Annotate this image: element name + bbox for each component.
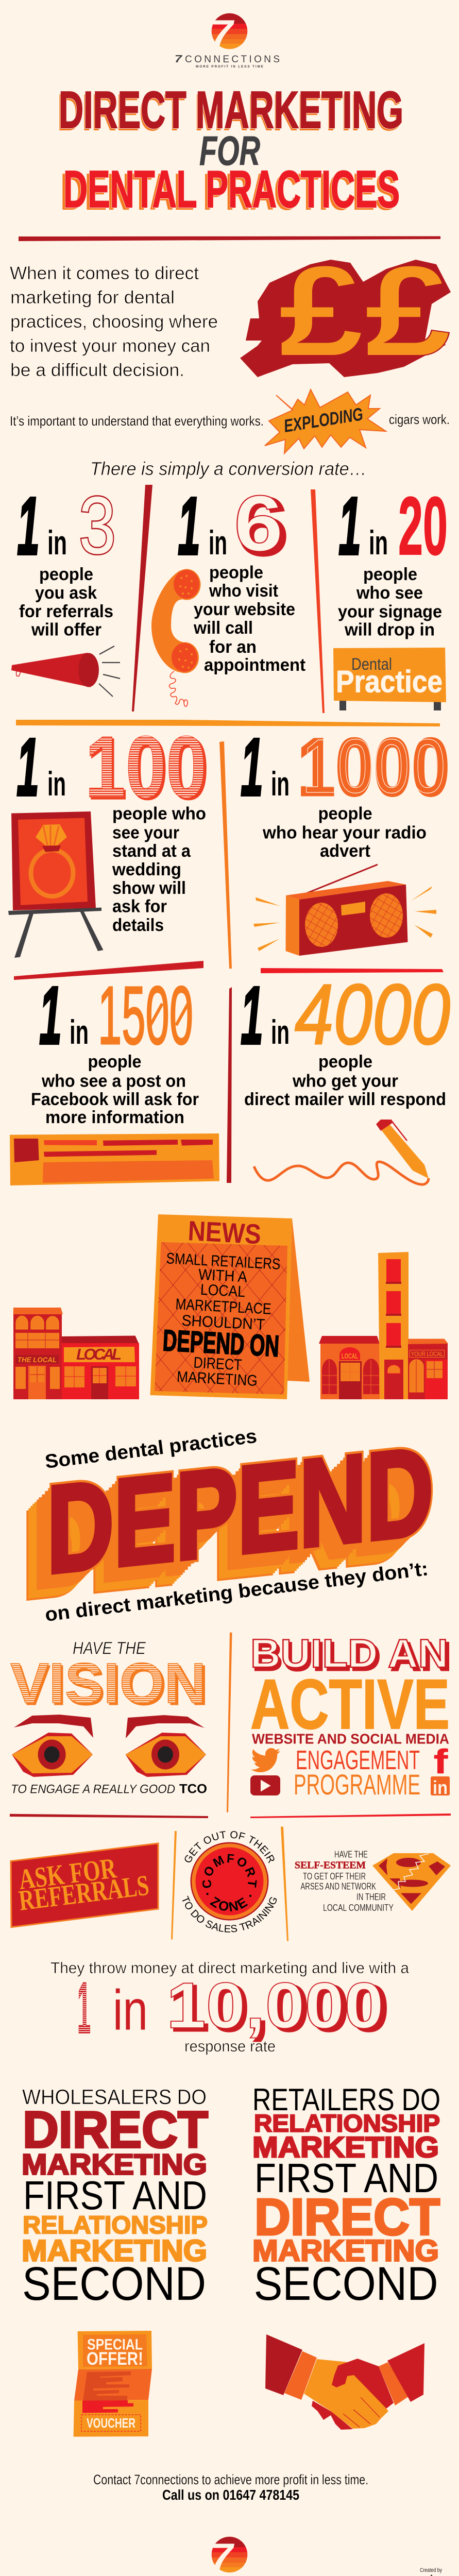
panel: wholesalers: WHOLESALERS DO xyxy=(22,2085,207,2109)
panel: 1 in 1500: people xyxy=(88,1052,141,1072)
panel: have the vision: VISION xyxy=(10,1652,206,1715)
panel: 1 in 6: who visit xyxy=(209,581,278,601)
text: contact xyxy=(93,2472,368,2503)
panel: build an active: BUILD AN xyxy=(250,1631,448,1676)
panel: retailers: MARKETING xyxy=(252,2234,439,2268)
logo: 7connections header: 7 xyxy=(210,13,234,54)
panel: retailers: DIRECT xyxy=(254,2189,440,2246)
text: contact: Call us on 01647 478145 xyxy=(162,2487,299,2503)
panel: 1 in 100: wedding xyxy=(112,860,181,879)
illustration: left shops: THE LOCAL xyxy=(18,1355,57,1364)
panel: retailers: SECOND xyxy=(254,2258,438,2310)
illustration: right shops xyxy=(319,1252,448,1399)
logo: 7connections header: 7 xyxy=(175,54,182,65)
credit: created by apexhub: Created by xyxy=(420,2567,442,2573)
panel: 1 in 100: stand at a xyxy=(112,841,191,861)
panel: 1 in 3: for referrals xyxy=(19,602,113,621)
panel: comfort zone badge xyxy=(182,1831,277,1933)
panel: build an active xyxy=(250,1631,451,1801)
icon: superman shield xyxy=(372,1853,451,1911)
panel: comfort zone badge: TO DO SALES TRAINING xyxy=(182,1896,277,1933)
panel: 1 in 3: 1 xyxy=(17,480,40,572)
panel: 1 in 6: appointment xyxy=(204,655,305,675)
panel: self-esteem: IN THEIR xyxy=(356,1892,386,1902)
panel: 1 in 1500 xyxy=(10,969,219,1185)
panel: ask for referrals: REFERRALS xyxy=(17,1869,151,1917)
panel: 1 in 6: 6 xyxy=(234,479,283,568)
panel: 1 in 1500: more information xyxy=(45,1108,184,1127)
panel: 1 in 100: in xyxy=(47,765,66,803)
icon: youtube xyxy=(250,1775,280,1795)
panel: retailers: MARKETING xyxy=(252,2131,439,2164)
panel: have the vision xyxy=(10,1639,209,1796)
panel: comfort zone badge: · ZONE · xyxy=(206,1893,252,1911)
text: on direct marketing: on direct marketing because they don’t: xyxy=(44,1558,430,1626)
panel: 1 in 1500: 1500 xyxy=(98,969,193,1061)
icon: double pound signs: £ xyxy=(279,239,363,383)
intro text xyxy=(10,263,218,380)
intro text: to invest your money can xyxy=(10,336,210,356)
illustration: news sandwich board: SHOULDN’T xyxy=(181,1312,265,1333)
panel: 1 in 4000: 1 xyxy=(241,969,263,1061)
icon: exploding starburst: EXPLODING xyxy=(282,404,364,436)
panel: self-esteem: TO GET OFF THEIR xyxy=(303,1871,366,1882)
panel: build an active: WEBSITE AND SOCIAL MEDIA xyxy=(252,1731,449,1747)
illustration: news sandwich board: MARKETPLACE xyxy=(175,1296,271,1318)
icon: double pound signs: £ xyxy=(365,239,451,383)
panel: have the vision: VISION xyxy=(12,1654,209,1717)
panel: 1 in 6 xyxy=(151,479,305,706)
stat: 1 in 10,000 xyxy=(77,1967,389,2055)
stat: 1 in 10,000: 10,000 xyxy=(169,1972,389,2045)
panel: 1 in 4000: who get your xyxy=(292,1072,398,1091)
panel: have the vision: TCO xyxy=(179,1782,207,1796)
icon: special offer voucher: OFFER! xyxy=(87,2349,143,2369)
panel: ask for referrals xyxy=(11,1843,158,1927)
panel: 1 in 20: in xyxy=(369,523,388,562)
illustration: right shops: LOCAL xyxy=(342,1352,358,1361)
illustration: news sandwich board: MARKETING xyxy=(176,1368,258,1389)
panel: wholesalers: MARKETING xyxy=(22,2148,207,2181)
panel: 1 in 6: 1 xyxy=(178,480,200,572)
text: everything works: cigars work. xyxy=(389,412,450,427)
icon: eyes and eyebrows xyxy=(12,1715,206,1777)
panel: retailers: RELATIONSHIP xyxy=(254,2110,440,2137)
panel: 1 in 3 xyxy=(11,480,120,697)
panel: 1 in 1000: who hear your radio xyxy=(262,823,427,843)
illustration: news sandwich board: DEPEND ON xyxy=(162,1324,280,1363)
icon: special offer voucher: VOUCHER xyxy=(87,2415,135,2431)
icon: double pound signs xyxy=(240,239,451,383)
panel: 1 in 4000: direct mailer will respond xyxy=(244,1090,446,1109)
subheading: conversion rate: There is simply a conversion rate… xyxy=(90,458,367,479)
panel: 1 in 1000 xyxy=(241,721,450,956)
illustration: news sandwich board: DIRECT xyxy=(193,1354,242,1374)
illustration: left shops xyxy=(13,1308,139,1399)
panel: 1 in 100: details xyxy=(112,916,164,935)
panel: 1 in 100: 1 xyxy=(16,721,39,813)
panel: 1 in 6: 6 xyxy=(236,480,288,572)
logo: 7connections footer xyxy=(211,2537,247,2573)
panel: 1 in 100: see your xyxy=(112,823,179,843)
credit: created by apexhub xyxy=(418,2567,444,2576)
panel: wholesalers: MARKETING xyxy=(22,2234,207,2268)
text: everything works: It’s important to understand that everything works. xyxy=(10,413,264,429)
illustration: news sandwich board xyxy=(150,1214,310,1399)
panel: self-esteem: ARSES AND NETWORK xyxy=(301,1882,376,1892)
panel: 1 in 3: in xyxy=(47,523,67,562)
panel: self-esteem: SELF-ESTEEM xyxy=(295,1860,366,1871)
intro text: When it comes to direct xyxy=(10,263,199,283)
stat: 1 in 10,000: in xyxy=(113,1978,148,2042)
illustration: left shops: LOCAL xyxy=(76,1345,122,1363)
panel: 1 in 20: your signage xyxy=(338,602,442,622)
panel: 1 in 3: people xyxy=(39,565,93,584)
panel: 1 in 6: for an xyxy=(209,637,257,657)
panel: 1 in 1000: advert xyxy=(320,841,370,861)
panel: 1 in 100: people who xyxy=(112,804,206,824)
logo: 7connections header: MORE PROFIT IN LESS TIME xyxy=(196,65,264,69)
panel: 1 in 3: will offer xyxy=(31,620,101,640)
panel: wholesalers xyxy=(22,2085,208,2310)
title: FOR xyxy=(199,128,260,174)
panel: 1 in 100 xyxy=(8,718,209,958)
intro text: be a difficult decision. xyxy=(10,360,184,380)
text: everything works xyxy=(10,412,450,429)
panel: 1 in 3: you ask xyxy=(35,583,97,603)
panel: 1 in 3: 3 xyxy=(79,480,116,571)
panel: 1 in 20: 1 xyxy=(338,480,361,572)
panel: self-esteem: HAVE THE xyxy=(334,1850,368,1860)
panel: retailers xyxy=(252,2082,440,2310)
icon: dental practice sign xyxy=(333,648,446,710)
icon: handshake xyxy=(265,2334,424,2430)
panel: 1 in 1000: in xyxy=(271,765,290,803)
panel: have the vision: HAVE THE xyxy=(73,1639,146,1658)
stat: 1 in 10,000: 1 xyxy=(77,1967,91,2049)
panel: 1 in 100: ask for xyxy=(112,896,167,916)
illustration: news sandwich board: LOCAL xyxy=(200,1281,246,1300)
panel: 1 in 4000: people xyxy=(318,1052,372,1072)
panel: 1 in 20: people xyxy=(363,565,417,584)
illustration: right shops: YOUR LOCAL xyxy=(411,1350,443,1358)
panel: self-esteem: LOCAL COMMUNITY xyxy=(323,1903,394,1913)
panel: 1 in 6: in xyxy=(209,523,227,562)
panel: 1 in 100: 100 xyxy=(87,720,209,818)
panel: build an active: BUILD AN xyxy=(252,1634,451,1679)
panel: self-esteem xyxy=(295,1850,451,1913)
stat: 1 in 10,000: response rate xyxy=(184,2037,276,2055)
panel: wholesalers: SECOND xyxy=(22,2258,206,2310)
logo: 7connections header: CONNECTIONS xyxy=(185,54,280,65)
panel: 1 in 6: people xyxy=(209,563,263,583)
illustration: news sandwich board: SMALL RETAILERS xyxy=(166,1250,281,1273)
panel: 1 in 20: will drop in xyxy=(344,620,435,640)
icon: special offer voucher: SPECIAL xyxy=(87,2336,143,2353)
icon: exploding starburst xyxy=(265,389,386,453)
logo: 7connections header xyxy=(175,13,280,69)
panel: 1 in 1000: 1 xyxy=(241,721,263,813)
panel: 1 in 1500: in xyxy=(70,1013,89,1051)
panel: 1 in 1500: who see a post on xyxy=(41,1072,186,1091)
icon: dental practice sign: Dental xyxy=(351,655,392,673)
icon: facebook post card xyxy=(10,1133,219,1185)
icon: radio xyxy=(253,865,436,956)
panel: ask for referrals: ASK FOR xyxy=(17,1852,118,1896)
panel: 1 in 20 xyxy=(333,480,448,710)
panel: comfort zone badge: COMFORT xyxy=(202,1854,257,1888)
panel: 1 in 100: 100 xyxy=(85,718,207,816)
icon: facebook: f xyxy=(434,1742,448,1781)
text: some dental practices: Some dental practices xyxy=(44,1426,258,1473)
panel: wholesalers: RELATIONSHIP xyxy=(23,2212,208,2239)
panel: 1 in 1500: Facebook will ask for xyxy=(31,1090,199,1109)
panel: wholesalers: FIRST AND xyxy=(23,2173,207,2218)
icon: easel with ring xyxy=(8,811,103,958)
icon: megaphone xyxy=(11,646,120,697)
icon: pen and squiggle xyxy=(254,1120,429,1184)
panel: 1 in 1500: 1 xyxy=(39,969,62,1061)
panel: have the vision: TO ENGAGE A REALLY GOOD xyxy=(11,1783,175,1796)
panel: wholesalers: DIRECT xyxy=(23,2101,208,2159)
illustration: news sandwich board: WITH A xyxy=(198,1266,248,1285)
panel: comfort zone badge: GET OUT OF THEIR xyxy=(184,1831,275,1863)
panel: 1 in 6: your website xyxy=(194,600,295,619)
intro text: practices, choosing where xyxy=(10,312,218,332)
icon: linkedin: in xyxy=(433,1777,448,1798)
intro text: marketing for dental xyxy=(10,287,175,308)
text: throw money: They throw money at direct marketing and live with a xyxy=(50,1959,410,1977)
panel: 1 in 20: who see xyxy=(356,583,423,603)
panel: 1 in 100: show will xyxy=(112,878,186,898)
panel: 1 in 6: will call xyxy=(193,618,253,638)
title xyxy=(57,81,403,221)
icon: special offer voucher xyxy=(74,2331,152,2437)
panel: 1 in 4000 xyxy=(241,967,450,1184)
illustration: news sandwich board: NEWS xyxy=(187,1215,262,1250)
text: contact: Contact 7connections to achieve more profit in less time. xyxy=(93,2472,368,2487)
panel: 1 in 1000: people xyxy=(318,804,372,824)
icon: telephone handset xyxy=(151,569,201,706)
panel: 1 in 4000: in xyxy=(271,1013,290,1051)
icon: dental practice sign: Practice xyxy=(336,665,443,699)
icon: twitter xyxy=(251,1748,280,1772)
stat: 1 in 10,000: 10,000 xyxy=(166,1969,384,2042)
